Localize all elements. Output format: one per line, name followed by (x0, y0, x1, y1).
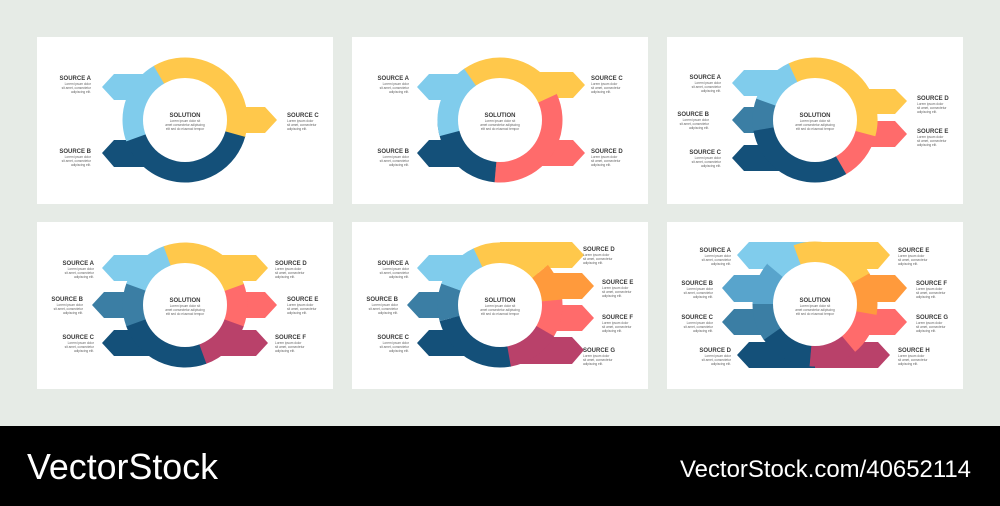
label C: SOURCE C (689, 150, 722, 156)
label F: sit amet, consectetur (275, 345, 305, 349)
label E: sit amet, consectetur (898, 258, 928, 262)
label E: adipiscing elit. (287, 311, 307, 315)
label B: Lorem ipsum dolor (383, 155, 410, 159)
label A (60, 76, 92, 94)
solution text: Lorem ipsum dolor sit (170, 119, 200, 123)
solution text: elit sed do eiusmod tempor (796, 312, 835, 316)
label D: Lorem ipsum dolor (275, 267, 302, 271)
label C: SOURCE C (591, 76, 623, 82)
label E: Lorem ipsum dolor (917, 135, 944, 139)
ring (427, 232, 573, 378)
label H (898, 348, 930, 366)
label B: SOURCE B (59, 149, 92, 155)
label A (378, 76, 410, 94)
label B: sit amet, consectetur (684, 291, 714, 295)
label C: sit amet, consectetur (65, 345, 95, 349)
label B: SOURCE B (366, 297, 399, 303)
label A (700, 248, 732, 266)
label C: Lorem ipsum dolor (695, 156, 722, 160)
label A: Lorem ipsum dolor (65, 82, 92, 86)
label C: adipiscing elit. (287, 127, 307, 131)
label B (377, 149, 410, 167)
label A: adipiscing elit. (74, 275, 94, 279)
solution text: elit sed do eiusmod tempor (481, 127, 520, 131)
arrow E (185, 292, 277, 318)
arrow C (500, 72, 585, 98)
arrow D (737, 342, 815, 368)
label D: Lorem ipsum dolor (705, 354, 732, 358)
solution text: SOLUTION (484, 298, 516, 304)
solution text: SOLUTION (800, 113, 830, 119)
arrow F (185, 330, 268, 356)
label F (602, 315, 633, 333)
footer url text: VectorStock.com/40652114 (680, 456, 971, 483)
label F: sit amet, consectetur (602, 325, 632, 329)
label E: adipiscing elit. (602, 294, 622, 298)
label H: SOURCE H (898, 348, 930, 354)
label A: sit amet, consectetur (65, 271, 95, 275)
solution text: elit sed do eiusmod tempor (166, 312, 205, 316)
label C: Lorem ipsum dolor (383, 341, 410, 345)
label C: Lorem ipsum dolor (687, 321, 714, 325)
arrow A (417, 255, 500, 281)
label G: Lorem ipsum dolor (916, 321, 943, 325)
arrow A (417, 74, 500, 100)
label D (275, 261, 307, 279)
label B: Lorem ipsum dolor (683, 118, 710, 122)
label B: Lorem ipsum dolor (372, 303, 399, 307)
label H: adipiscing elit. (898, 362, 918, 366)
arrow F (500, 305, 594, 331)
label B: sit amet, consectetur (369, 307, 399, 311)
arrow B (102, 140, 185, 167)
arrow E (815, 242, 890, 269)
label C: Lorem ipsum dolor (68, 341, 95, 345)
arrow C (732, 145, 815, 171)
label D (591, 149, 623, 167)
label B: SOURCE B (677, 112, 710, 118)
label C: adipiscing elit. (693, 329, 713, 333)
footer logo text: VectorStock (27, 446, 219, 487)
label D: adipiscing elit. (583, 261, 603, 265)
label A: adipiscing elit. (701, 89, 721, 93)
label E: SOURCE E (898, 248, 929, 254)
ring (744, 49, 886, 191)
arrow A (732, 70, 815, 96)
label E (917, 129, 948, 147)
label A: Lorem ipsum dolor (383, 267, 410, 271)
label E: SOURCE E (917, 129, 948, 135)
arrow E (815, 121, 907, 147)
label F: adipiscing elit. (916, 295, 936, 299)
label B: adipiscing elit. (71, 163, 91, 167)
panel 1: three sources (37, 37, 333, 204)
label D: SOURCE D (699, 348, 732, 354)
solution text: amet consectetur adipiscing (165, 123, 205, 127)
solution text: amet consectetur adipiscing (165, 308, 205, 312)
solution text: elit sed do eiusmod tempor (481, 312, 520, 316)
label C: sit amet, consectetur (692, 160, 722, 164)
label C: sit amet, consectetur (287, 123, 317, 127)
label A: adipiscing elit. (71, 90, 91, 94)
label G: adipiscing elit. (583, 362, 603, 366)
label C: adipiscing elit. (74, 349, 94, 353)
label C (287, 113, 319, 131)
label G: SOURCE G (583, 348, 615, 354)
label E: sit amet, consectetur (917, 139, 947, 143)
label H: Lorem ipsum dolor (898, 354, 925, 358)
label A: SOURCE A (60, 76, 92, 82)
label A: adipiscing elit. (711, 262, 731, 266)
label D: Lorem ipsum dolor (583, 253, 610, 257)
label C: adipiscing elit. (701, 164, 721, 168)
label G (583, 348, 615, 366)
label A: adipiscing elit. (389, 90, 409, 94)
label D (583, 247, 615, 265)
label F (916, 281, 947, 299)
label D: Lorem ipsum dolor (917, 102, 944, 106)
label B: adipiscing elit. (378, 311, 398, 315)
label C (689, 150, 722, 168)
label E: SOURCE E (287, 297, 318, 303)
ring (118, 238, 252, 372)
arrow A (102, 74, 185, 100)
label E: adipiscing elit. (898, 262, 918, 266)
label A: Lorem ipsum dolor (383, 82, 410, 86)
label F: SOURCE F (602, 315, 633, 321)
label E (287, 297, 318, 315)
arrow D (500, 242, 584, 268)
panel 6: eight sources (667, 222, 963, 389)
label C: SOURCE C (377, 335, 410, 341)
solution text (165, 298, 205, 316)
panel 4: six sources (37, 222, 333, 389)
label F: Lorem ipsum dolor (602, 321, 629, 325)
label A: sit amet, consectetur (702, 258, 732, 262)
label B: Lorem ipsum dolor (687, 287, 714, 291)
label C (62, 335, 95, 353)
ring (114, 49, 256, 191)
label A: Lorem ipsum dolor (68, 267, 95, 271)
solution text: amet consectetur adipiscing (480, 123, 520, 127)
label A: SOURCE A (378, 76, 410, 82)
label D: sit amet, consectetur (591, 159, 621, 163)
label G: SOURCE G (916, 315, 948, 321)
label B (51, 297, 84, 315)
label F (275, 335, 306, 353)
label F: adipiscing elit. (602, 329, 622, 333)
solution text: Lorem ipsum dolor sit (485, 119, 515, 123)
label D: sit amet, consectetur (917, 106, 947, 110)
arrow C (417, 330, 500, 356)
label D: sit amet, consectetur (583, 257, 613, 261)
label C: SOURCE C (62, 335, 95, 341)
label A: sit amet, consectetur (62, 86, 92, 90)
label D: adipiscing elit. (917, 110, 937, 114)
label C (591, 76, 623, 94)
solution text: SOLUTION (800, 298, 830, 304)
arrow B (732, 107, 815, 133)
label A: Lorem ipsum dolor (705, 254, 732, 258)
label B: sit amet, consectetur (62, 159, 92, 163)
arrow G (500, 337, 584, 364)
label B (366, 297, 399, 315)
panel 3: five sources (667, 37, 963, 204)
arrow E (500, 273, 594, 299)
label C: SOURCE C (287, 113, 319, 119)
label A (378, 261, 410, 279)
solution text (795, 298, 835, 316)
label G: adipiscing elit. (916, 329, 936, 333)
label D (699, 348, 732, 366)
label C (377, 335, 410, 353)
label D: adipiscing elit. (275, 275, 295, 279)
solution text (165, 113, 205, 131)
label F: Lorem ipsum dolor (275, 341, 302, 345)
solution text (795, 113, 835, 131)
label C (681, 315, 714, 333)
label B: Lorem ipsum dolor (65, 155, 92, 159)
label F: Lorem ipsum dolor (916, 287, 943, 291)
panel 5: seven sources (352, 222, 648, 389)
label E: sit amet, consectetur (602, 290, 632, 294)
label E: Lorem ipsum dolor (602, 286, 629, 290)
solution text: elit sed do eiusmod tempor (166, 127, 205, 131)
label D: sit amet, consectetur (275, 271, 305, 275)
arrow F (815, 275, 907, 302)
solution text: amet consectetur adipiscing (795, 123, 835, 127)
solution text: amet consectetur adipiscing (795, 308, 835, 312)
label B: sit amet, consectetur (680, 122, 710, 126)
label C: sit amet, consectetur (380, 345, 410, 349)
label B: adipiscing elit. (63, 311, 83, 315)
label C: Lorem ipsum dolor (591, 82, 618, 86)
label B: SOURCE B (377, 149, 410, 155)
ring (428, 48, 572, 192)
label B (677, 112, 710, 130)
label B: SOURCE B (681, 281, 714, 287)
solution text: SOLUTION (170, 298, 200, 304)
label E: adipiscing elit. (917, 143, 937, 147)
label G: sit amet, consectetur (583, 358, 613, 362)
panel 2: four sources (352, 37, 648, 204)
label G: Lorem ipsum dolor (583, 354, 610, 358)
arrow A (737, 242, 815, 269)
solution text: SOLUTION (484, 113, 516, 119)
label D: SOURCE D (591, 149, 623, 155)
footer band (0, 426, 1000, 506)
arrow B (407, 292, 500, 318)
solution text (480, 113, 520, 131)
arrow D (500, 140, 585, 166)
arrow D (185, 255, 268, 281)
label B: adipiscing elit. (689, 126, 709, 130)
label A (690, 75, 722, 93)
label A: sit amet, consectetur (380, 86, 410, 90)
label D: SOURCE D (275, 261, 307, 267)
label A (63, 261, 95, 279)
label C: sit amet, consectetur (684, 325, 714, 329)
label E: sit amet, consectetur (287, 307, 317, 311)
label F: sit amet, consectetur (916, 291, 946, 295)
label A: SOURCE A (700, 248, 732, 254)
label A: sit amet, consectetur (380, 271, 410, 275)
label H: sit amet, consectetur (898, 358, 928, 362)
label C: sit amet, consectetur (591, 86, 621, 90)
arrow A (102, 255, 185, 281)
label F: SOURCE F (916, 281, 947, 287)
label E (898, 248, 929, 266)
label A: SOURCE A (378, 261, 410, 267)
solution text: Lorem ipsum dolor sit (485, 304, 515, 308)
label A: Lorem ipsum dolor (695, 81, 722, 85)
arrow B (417, 140, 500, 167)
label B: SOURCE B (51, 297, 84, 303)
arrow C (722, 309, 815, 335)
label F: SOURCE F (275, 335, 306, 341)
solution text: Lorem ipsum dolor sit (170, 304, 200, 308)
label D: SOURCE D (917, 96, 949, 102)
label B (59, 149, 92, 167)
label C: Lorem ipsum dolor (287, 119, 314, 123)
label C: adipiscing elit. (591, 90, 611, 94)
solution text: elit sed do eiusmod tempor (796, 127, 835, 131)
solution text: SOLUTION (170, 113, 200, 119)
label B: adipiscing elit. (693, 295, 713, 299)
label B (681, 281, 714, 299)
label B: adipiscing elit. (389, 163, 409, 167)
label D (917, 96, 949, 114)
label C: adipiscing elit. (389, 349, 409, 353)
label D: adipiscing elit. (591, 163, 611, 167)
label A: sit amet, consectetur (692, 85, 722, 89)
arrow D (815, 89, 907, 114)
label B: Lorem ipsum dolor (57, 303, 84, 307)
solution text: amet consectetur adipiscing (480, 308, 520, 312)
arrow C (185, 107, 277, 133)
arrow C (102, 330, 185, 356)
label E (602, 280, 633, 298)
arrow B (92, 292, 185, 318)
label D: SOURCE D (583, 247, 615, 253)
label E: Lorem ipsum dolor (287, 303, 314, 307)
arrow B (722, 275, 815, 302)
arrow H (815, 342, 890, 368)
solution text (480, 298, 520, 316)
label A: SOURCE A (690, 75, 722, 81)
label D: adipiscing elit. (711, 362, 731, 366)
label G: sit amet, consectetur (916, 325, 946, 329)
label G (916, 315, 948, 333)
label A: adipiscing elit. (389, 275, 409, 279)
label B: sit amet, consectetur (54, 307, 84, 311)
label B: sit amet, consectetur (380, 159, 410, 163)
arrow G (815, 309, 907, 335)
solution text: Lorem ipsum dolor sit (800, 119, 830, 123)
ring (742, 231, 888, 377)
label D: Lorem ipsum dolor (591, 155, 618, 159)
label F: adipiscing elit. (275, 349, 295, 353)
label E: Lorem ipsum dolor (898, 254, 925, 258)
label D: sit amet, consectetur (702, 358, 732, 362)
label E: SOURCE E (602, 280, 633, 286)
label A: SOURCE A (63, 261, 95, 267)
label C: SOURCE C (681, 315, 714, 321)
solution text: Lorem ipsum dolor sit (800, 304, 830, 308)
